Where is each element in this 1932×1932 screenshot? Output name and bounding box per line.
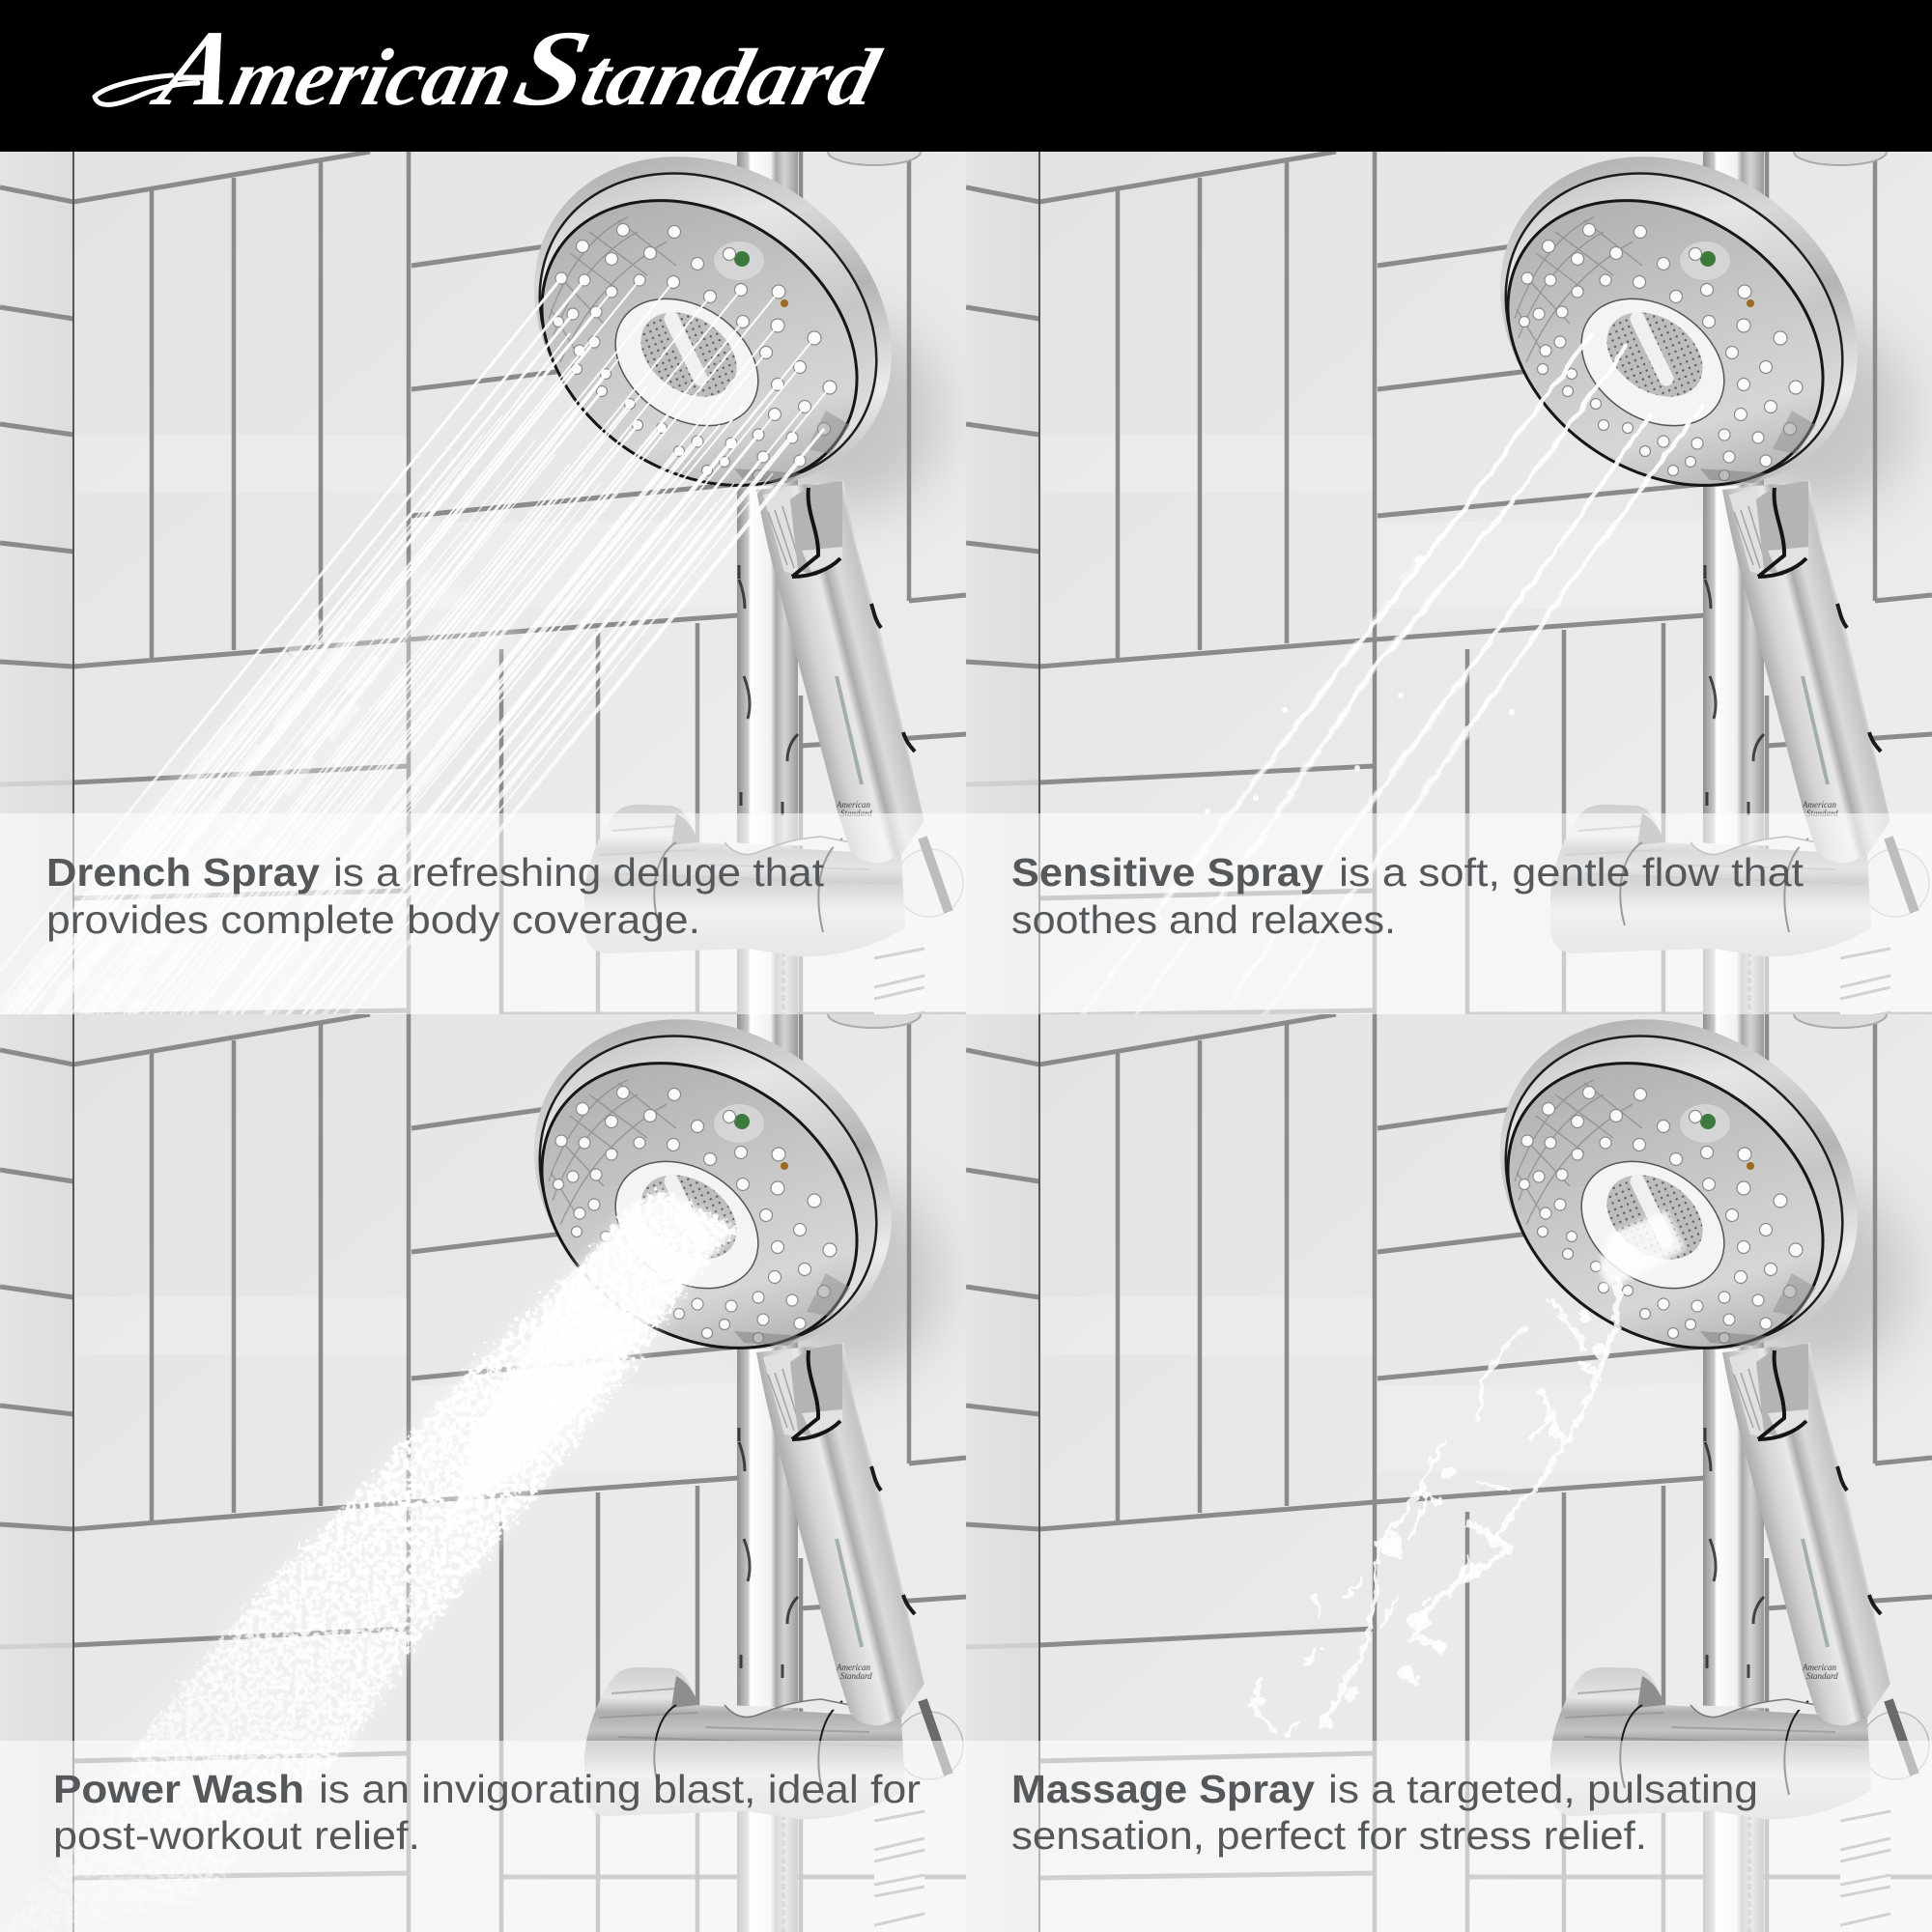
- caption: power wash: [53, 1767, 921, 1858]
- panel: sensitive spray: [966, 152, 1932, 1014]
- shower handle: [1722, 1343, 1890, 1725]
- chrome slide rail: [1703, 1014, 1764, 1932]
- massage water splash: [1254, 1210, 1686, 1737]
- caption: power wash: Power Wash: [53, 1767, 304, 1811]
- hose: [1840, 1811, 1890, 1932]
- caption: drench spray: provides complete body coverage.: [46, 897, 700, 942]
- panel: drench spray: [0, 152, 966, 1014]
- translucent caption band: [0, 813, 966, 1014]
- caption: massage spray: is a targeted, pulsating: [1328, 1767, 1758, 1811]
- shower head: [1500, 156, 1858, 487]
- caption: sensitive spray: [1012, 858, 1804, 933]
- caption: drench spray: is a refreshing deluge that: [333, 850, 825, 895]
- chrome slide rail: [737, 1014, 798, 1932]
- slide clamp: [1550, 1667, 1929, 1819]
- caption: power wash: is an invigorating blast, ideal for: [319, 1767, 921, 1811]
- power wash water plume: [0, 1189, 739, 1932]
- translucent caption band: [966, 1741, 1932, 1932]
- tile wall: [966, 138, 1932, 1079]
- caption: massage spray: [1011, 1767, 1758, 1858]
- top brand bar: [0, 0, 1932, 152]
- shower head: [534, 156, 892, 487]
- tile wall: [966, 1001, 1932, 1932]
- panel: massage spray: [966, 952, 1932, 1932]
- tile wall: [0, 138, 966, 1079]
- panel: power wash: [0, 952, 966, 1932]
- shower handle: [756, 1343, 924, 1725]
- caption: sensitive spray: is a soft, gentle flow that: [1339, 850, 1804, 895]
- caption: drench spray: Drench Spray: [46, 850, 320, 895]
- hose: [874, 1811, 924, 1932]
- drench water spray: [4, 281, 827, 1014]
- shower handle: [1722, 480, 1890, 863]
- chrome slide rail: [1703, 152, 1764, 1079]
- slide clamp: [1550, 805, 1929, 956]
- caption: massage spray: Massage Spray: [1011, 1767, 1315, 1811]
- logo: American Standard script wordmark: [95, 9, 895, 128]
- slide clamp: [584, 1667, 963, 1819]
- hose: [873, 947, 925, 1014]
- caption: drench spray: [46, 850, 825, 942]
- caption: sensitive spray: soothes and relaxes.: [1011, 897, 1396, 942]
- logo: American Standard script wordmark: Standard: [504, 9, 895, 128]
- shower head: [1436, 952, 1921, 1417]
- shower head: [470, 952, 955, 1417]
- shower handle: [756, 480, 924, 863]
- hose: [1839, 947, 1891, 1014]
- logo: American Standard script wordmark: American: [143, 9, 528, 128]
- chrome slide rail: [737, 152, 798, 1079]
- caption: power wash: post-workout relief.: [53, 1813, 420, 1858]
- slide clamp: [584, 805, 963, 956]
- translucent caption band: [966, 813, 1932, 1014]
- caption: massage spray: sensation, perfect for stress relief.: [1011, 1813, 1647, 1858]
- caption: sensitive spray: Sensitive Spray: [1011, 850, 1323, 895]
- sensitive water jets: [1082, 333, 1703, 1014]
- tile wall: [0, 1001, 966, 1932]
- translucent caption band: [0, 1741, 966, 1932]
